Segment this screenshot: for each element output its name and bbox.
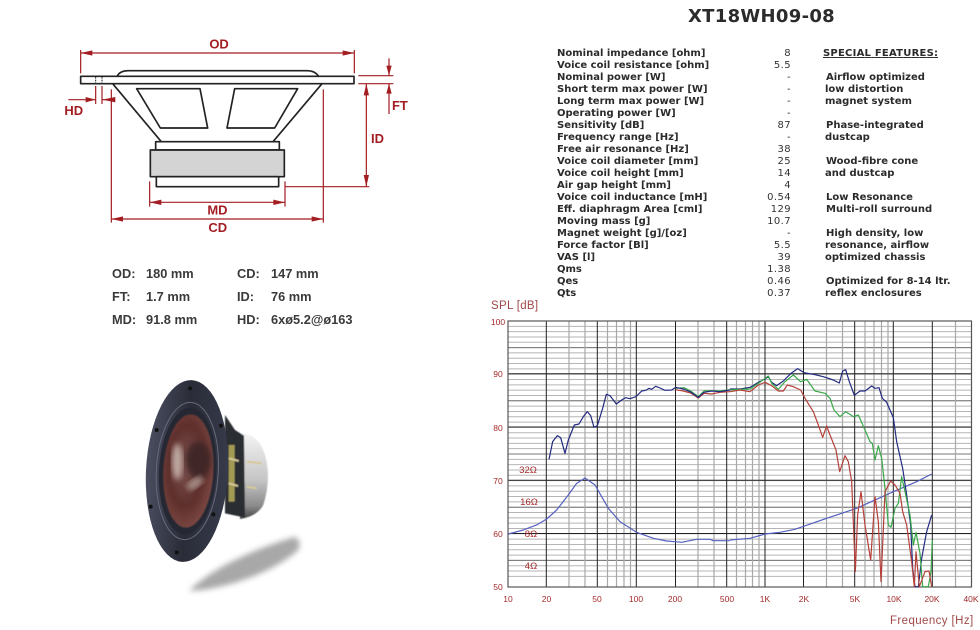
axis labels: 100 xyxy=(491,317,505,327)
blue response right xyxy=(730,369,932,587)
red response left xyxy=(676,390,730,398)
special features: resonance, airflow xyxy=(825,240,929,251)
parameter names: Voice coil resistance [ohm] xyxy=(557,60,709,71)
parameter names: Free air resonance [Hz] xyxy=(557,144,689,155)
parameter names: Force factor [Bl] xyxy=(557,240,649,251)
parameter values: 0.37 xyxy=(767,288,791,299)
parameter names: Voice coil height [mm] xyxy=(557,168,684,179)
axis title: SPL: SPL [dB] xyxy=(491,300,538,312)
parameter names: Long term max power [W] xyxy=(557,96,704,107)
axis labels: 10 xyxy=(503,594,513,604)
chart grid xyxy=(508,321,972,587)
special features: SPECIAL FEATURES: xyxy=(823,48,938,59)
red dimension lines and labels: OD xyxy=(209,37,229,52)
impedance curve left xyxy=(508,478,730,542)
shadow xyxy=(189,537,299,591)
dimensions table: 1.7 mm xyxy=(146,289,190,304)
special features: magnet system xyxy=(825,96,912,107)
parameter values: - xyxy=(787,72,791,83)
special features: dustcap xyxy=(825,132,870,143)
dimensions table: HD: xyxy=(237,312,260,327)
cone xyxy=(160,413,216,529)
dimensions table: 91.8 mm xyxy=(146,312,197,327)
axis labels: 70 xyxy=(493,476,503,486)
dimensions table: 76 mm xyxy=(271,289,312,304)
parameter names: Voice coil diameter [mm] xyxy=(557,156,698,167)
parameter values: 0.46 xyxy=(767,276,791,287)
parameter names: Qms xyxy=(557,264,582,275)
red dimension lines and labels: MD xyxy=(207,203,228,218)
parameter values: 38 xyxy=(777,144,791,155)
red dimension lines and labels: FT xyxy=(392,98,408,113)
axis labels: 16Ω xyxy=(520,497,538,508)
parameter names: Sensitivity [dB] xyxy=(557,120,644,131)
parameter values: 129 xyxy=(771,204,791,215)
parameter values: 0.54 xyxy=(767,192,791,203)
parameter values: 5.5 xyxy=(774,60,791,71)
dimensions table: 147 mm xyxy=(271,266,319,281)
axis labels: 50 xyxy=(493,582,503,592)
parameter names: Qts xyxy=(557,288,576,299)
axis labels: 10K xyxy=(886,594,902,604)
parameter values: - xyxy=(787,132,791,143)
parameter values: - xyxy=(787,96,791,107)
parameter values: 8 xyxy=(784,48,791,59)
dimensions table xyxy=(112,266,352,327)
red dimension lines and labels: HD xyxy=(64,103,83,118)
dimensions table: 180 mm xyxy=(146,266,194,281)
special features: Wood-fibre cone xyxy=(826,156,918,167)
axis labels: 100 xyxy=(629,594,643,604)
parameter names: Moving mass [g] xyxy=(557,216,650,227)
special features: Phase-integrated xyxy=(826,120,924,131)
parameter names: Nominal impedance [ohm] xyxy=(557,48,705,59)
special features: and dustcap xyxy=(825,168,894,179)
frequency response chart xyxy=(491,300,979,627)
specification table xyxy=(557,48,951,299)
axis labels xyxy=(491,317,979,604)
parameter names: Nominal power [W] xyxy=(557,72,666,83)
dimensions table: 6xø5.2@ø163 xyxy=(271,312,352,327)
parameter values: 1.38 xyxy=(767,264,791,275)
red response right xyxy=(730,382,932,587)
parameter names: VAS [l] xyxy=(557,252,595,263)
parameter values: 10.7 xyxy=(767,216,791,227)
axis labels: 200 xyxy=(668,594,682,604)
special features: Multi-roll surround xyxy=(826,204,932,215)
parameter values: - xyxy=(787,108,791,119)
parameter values: 4 xyxy=(784,180,791,191)
parameter names xyxy=(557,48,709,299)
curves, left half xyxy=(508,386,730,542)
dimensions table: OD: xyxy=(112,266,135,281)
parameter names: Frequency range [Hz] xyxy=(557,132,679,143)
axis labels: 20K xyxy=(924,594,940,604)
dimensions table: FT: xyxy=(112,289,130,304)
flange xyxy=(141,378,233,564)
speaker outline xyxy=(81,71,354,187)
red dimension lines and labels xyxy=(64,37,408,235)
title: XT18WH09-08 xyxy=(688,6,835,27)
dimensions table: CD: xyxy=(237,266,260,281)
parameter names: Operating power [W] xyxy=(557,108,676,119)
axis labels: 20 xyxy=(542,594,551,604)
parameter names: Qes xyxy=(557,276,578,287)
red dimension lines and labels: CD xyxy=(208,220,227,235)
impedance curve right xyxy=(730,474,932,540)
axis labels: 5K xyxy=(850,594,861,604)
axis labels: 60 xyxy=(493,529,503,539)
parameter names: Short term max power [W] xyxy=(557,84,708,95)
axis labels: 8Ω xyxy=(525,529,537,540)
parameter values: - xyxy=(787,84,791,95)
parameter values: 39 xyxy=(777,252,791,263)
axis labels: 2K xyxy=(799,594,810,604)
curves, right half xyxy=(730,369,932,587)
special features xyxy=(823,48,951,299)
special features: Airflow optimized xyxy=(826,72,925,83)
parameter values xyxy=(767,48,791,299)
parameter names: Eff. diaphragm Area [cmI] xyxy=(557,204,702,215)
axis labels: 40K xyxy=(963,594,979,604)
special features: Low Resonance xyxy=(826,192,913,203)
parameter values: 25 xyxy=(777,156,791,167)
special features: Optimized for 8-14 ltr. xyxy=(826,276,951,287)
blue response left xyxy=(549,386,730,459)
axis labels: 80 xyxy=(493,423,503,433)
special features: High density, low xyxy=(826,228,923,239)
parameter values: 5.5 xyxy=(774,240,791,251)
mounting holes xyxy=(149,386,223,554)
special features: reflex enclosures xyxy=(825,288,922,299)
special features: low distortion xyxy=(825,84,903,95)
parameter values: 87 xyxy=(777,120,791,131)
axis labels: 90 xyxy=(493,369,503,379)
axis title: Frequency: Frequency [Hz] xyxy=(890,615,974,627)
parameter names: Magnet weight [g]/[oz] xyxy=(557,228,687,239)
dimensions table: MD: xyxy=(112,312,136,327)
red dimension lines and labels: ID xyxy=(371,131,384,146)
axis labels: 500 xyxy=(720,594,734,604)
green response right xyxy=(730,375,932,587)
special features: optimized chassis xyxy=(825,252,925,263)
dimensions table: ID: xyxy=(237,289,254,304)
dimension drawing xyxy=(64,37,408,235)
parameter names: Voice coil inductance [mH] xyxy=(557,192,707,203)
axis labels: 1K xyxy=(760,594,771,604)
parameter values: - xyxy=(787,228,791,239)
axis labels: 4Ω xyxy=(525,561,537,572)
green response left xyxy=(676,388,730,397)
axis labels: 50 xyxy=(592,594,602,604)
motor xyxy=(225,415,268,519)
axis labels: 32Ω xyxy=(519,465,537,476)
parameter names: Air gap height [mm] xyxy=(557,180,671,191)
speaker photo xyxy=(141,378,299,591)
parameter values: 14 xyxy=(777,168,791,179)
